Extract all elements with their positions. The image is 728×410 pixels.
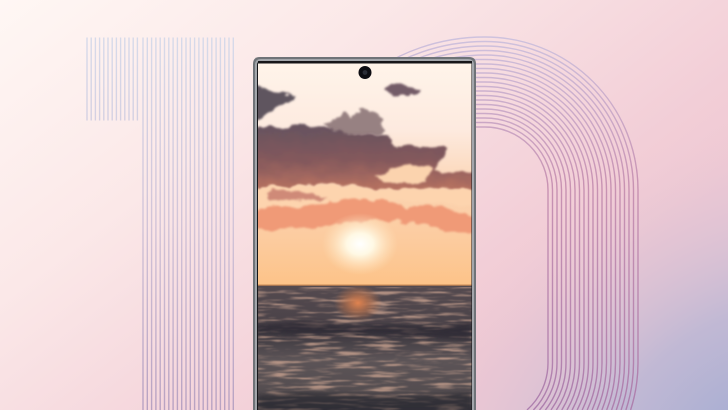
phone frame inner bezel [255,59,474,410]
water [258,285,472,410]
phone screen photo [252,63,476,410]
sun [327,215,393,272]
numeral zero line art [309,37,638,410]
lower dark swell [258,392,471,410]
front camera [358,66,372,79]
small cloud [384,83,421,96]
horizon line [258,284,472,286]
top bezel bar [258,61,472,64]
large dark cloud [252,124,476,190]
sky [258,63,472,286]
bright cloud gap [372,165,432,183]
phone [252,57,476,410]
dark swell band [258,321,471,340]
thin cloud streak [264,190,328,202]
sun reflection [336,286,380,320]
phone body frame [253,57,476,410]
wispy cloud [322,110,383,136]
top left cloud [254,86,296,120]
orange lower cloud [252,199,476,234]
pale band [258,183,472,192]
numeral one line art [87,38,233,410]
numeral one flag lines [87,38,137,120]
water ripples [258,287,472,410]
numeral one stem lines [143,38,233,410]
phone black bezel [257,61,472,410]
